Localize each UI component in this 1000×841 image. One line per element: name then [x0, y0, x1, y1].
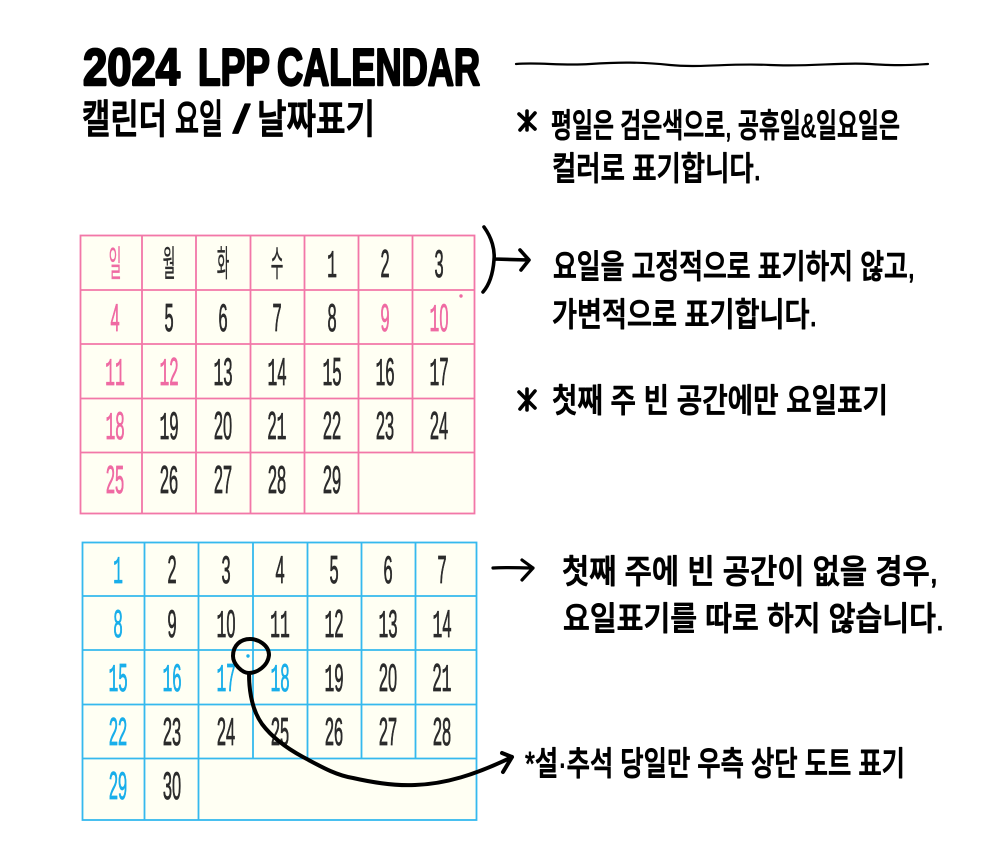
blue calendar dates week 1: 5 [329, 549, 339, 592]
blue calendar dates week 3: 18 [271, 657, 289, 703]
pink calendar dates week 3: 15 [323, 351, 341, 397]
blue calendar dates week 4: 28 [433, 711, 451, 754]
blue calendar dates week 1: 7 [437, 549, 447, 592]
blue calendar dates week 2: 10 [217, 603, 235, 649]
weekday labels row [109, 243, 444, 289]
title: LPP [198, 39, 270, 97]
blue calendar dates week 3: 15 [109, 657, 127, 703]
blue calendar dates week 4: 23 [163, 711, 181, 754]
header rule [516, 63, 928, 66]
weekday labels row: 2 [380, 243, 390, 286]
pink calendar dates week 5: 27 [214, 459, 232, 502]
blue calendar dates week 2: 11 [270, 604, 290, 649]
pink calendar dates week 5 [106, 459, 341, 502]
blue calendar dates week 1: 6 [383, 549, 393, 592]
blue calendar dates week 4: 26 [325, 711, 343, 754]
blue calendar dates week 4: 25 [271, 711, 289, 754]
note: no empty space second line: 요일표기를 따로 하지 않습니다. [563, 600, 944, 637]
blue calendar dates week 3: 19 [325, 657, 343, 703]
pink calendar dates week 2: 6 [218, 297, 228, 340]
holiday dot blue [246, 654, 250, 658]
pink calendar dates week 4: 19 [160, 405, 178, 451]
pink calendar dates week 2: 5 [164, 297, 174, 340]
subtitle: / [233, 98, 251, 142]
pink calendar dates week 3: 12 [160, 351, 178, 397]
blue calendar dates week 2: 8 [113, 603, 123, 646]
blue calendar dates week 2: 14 [433, 603, 451, 649]
blue calendar dates week 3: 16 [163, 657, 181, 703]
note: variable weekday display line 2: 가변적으로 표기합니다. [552, 296, 817, 333]
circle and curved arrow to dot note [233, 639, 512, 785]
subtitle: 캘린더 [82, 98, 167, 142]
blue calendar dates week 1: 2 [167, 549, 177, 592]
weekday labels row: 수 [271, 243, 283, 284]
pink calendar dates week 3: 16 [376, 351, 394, 397]
pink calendar dates week 3: 11 [105, 352, 125, 397]
panel: pink calendar [80, 236, 474, 514]
subtitle [82, 98, 375, 142]
weekday labels row: 월 [163, 243, 175, 284]
pink calendar dates week 5: 26 [160, 459, 178, 502]
note: first week empty space: 첫째 주 빈 공간에만 요일표기 [552, 382, 888, 419]
blue calendar dates week 4: 24 [217, 711, 235, 754]
pink calendar dates week 3: 17 [430, 351, 448, 397]
pink calendar dates week 4: 23 [376, 405, 394, 448]
subtitle: 날짜표기 [257, 98, 375, 142]
title: 2024 [83, 39, 180, 97]
blue calendar dates week 2 [113, 603, 451, 649]
blue calendar dates week 3 [109, 657, 451, 703]
pink calendar dates week 2: 8 [327, 297, 337, 340]
icon: asterisk note 1 [519, 111, 535, 130]
pink calendar dates week 4 [106, 405, 448, 451]
title: CALENDAR [277, 39, 480, 97]
pink calendar dates week 3 [105, 351, 448, 397]
icon: asterisk note 2 [519, 389, 535, 410]
pink calendar dates week 5: 29 [323, 459, 341, 502]
blue calendar dates week 2: 12 [325, 603, 343, 649]
blue calendar dates week 1: 4 [275, 549, 285, 592]
pink calendar grid [80, 236, 474, 514]
pink calendar dates week 3: 13 [214, 351, 232, 397]
blue calendar dates week 1 [113, 549, 447, 595]
panel: blue calendar [82, 542, 476, 820]
blue calendar dates week 3: 17 [217, 657, 235, 703]
blue calendar grid [82, 542, 476, 820]
blue calendar dates week 4: 27 [379, 711, 397, 754]
pink calendar dates week 2: 7 [272, 297, 282, 340]
pink calendar dates week 4: 20 [214, 405, 232, 448]
pink calendar dates week 3: 14 [268, 351, 286, 397]
pink calendar dates week 5: 28 [268, 459, 286, 502]
note: colour marking line 2: 컬러로 표기합니다. [552, 150, 761, 187]
note: no empty space first line: 첫째 주에 빈 공간이 없을 경우, [562, 553, 938, 590]
blue calendar dates week 5: 29 [109, 765, 127, 808]
weekday labels row: 화 [217, 243, 229, 284]
weekday labels row: 3 [434, 243, 444, 286]
arrow: to blue calendar note [493, 560, 533, 580]
blue calendar dates week 4 [109, 711, 451, 754]
title [83, 39, 480, 97]
blue calendar dates week 5: 30 [163, 765, 181, 808]
blue calendar dates week 3: 21 [433, 657, 451, 703]
weekday labels row: 1 [327, 244, 337, 289]
pink calendar dates week 2: 9 [380, 297, 390, 340]
bracket and arrow to note [483, 227, 529, 292]
pink calendar dates week 4: 21 [268, 405, 286, 451]
blue calendar dates week 1: 3 [221, 549, 231, 592]
blue calendar dates week 1: 1 [113, 550, 123, 595]
pink calendar dates week 2 [110, 297, 448, 343]
blue calendar dates week 2: 13 [379, 603, 397, 649]
pink calendar dates week 5: 25 [106, 459, 124, 502]
blue calendar dates week 2: 9 [167, 603, 177, 646]
pink calendar dates week 4: 18 [106, 405, 124, 451]
pink calendar dates week 2: 10 [430, 297, 448, 343]
subtitle: 요일 [175, 98, 223, 142]
pink calendar dates week 4: 24 [430, 405, 448, 448]
pink calendar dates week 2: 4 [110, 297, 120, 340]
weekday labels row: 일 [109, 243, 121, 284]
holiday dot pink [459, 294, 463, 298]
blue calendar dates week 3: 20 [379, 657, 397, 700]
pink calendar dates week 4: 22 [323, 405, 341, 448]
blue calendar dates week 5 [109, 765, 181, 808]
blue calendar dates week 4: 22 [109, 711, 127, 754]
